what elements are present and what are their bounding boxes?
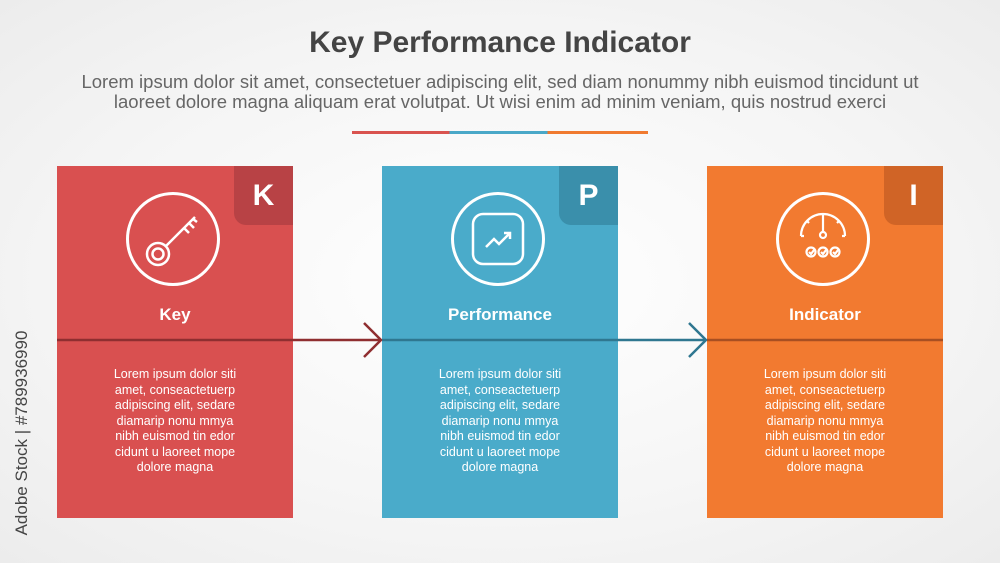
body text: Lorem ipsum dolor siti xyxy=(114,367,236,381)
arrow: performance to indicator xyxy=(382,323,706,357)
body text: adipiscing elit, sedare xyxy=(440,398,560,412)
body text: cidunt u laoreet mope xyxy=(115,444,235,458)
body text: dolore magna xyxy=(462,460,538,474)
subtitle xyxy=(81,71,919,112)
body text: amet, conseactetuerp xyxy=(765,382,885,396)
underline bars xyxy=(352,131,648,134)
tab K: K xyxy=(253,179,274,212)
title: Key Performance Indicator xyxy=(309,26,691,59)
tab I: I xyxy=(909,179,918,212)
line: indicator xyxy=(707,339,943,341)
icon: chart xyxy=(451,192,545,286)
body text: Lorem ipsum dolor siti xyxy=(764,367,886,381)
body text: diamarip nonu mmya xyxy=(767,414,883,428)
label: Performance xyxy=(448,305,552,324)
body text: Lorem ipsum dolor siti xyxy=(439,367,561,381)
body text: adipiscing elit, sedare xyxy=(765,398,885,412)
body text xyxy=(764,367,886,474)
body text: nibh euismod tin edor xyxy=(440,429,560,443)
body text: diamarip nonu mmya xyxy=(117,414,233,428)
icon: gauge xyxy=(776,192,870,286)
body text: dolore magna xyxy=(787,460,863,474)
body text: cidunt u laoreet mope xyxy=(440,444,560,458)
arrow: key to performance xyxy=(57,323,381,357)
body text: dolore magna xyxy=(137,460,213,474)
body text: amet, conseactetuerp xyxy=(440,382,560,396)
subtitle: laoreet dolore magna aliquam erat volutpat. Ut wisi enim ad minim veniam, quis nostrud exerci xyxy=(114,91,886,112)
panel: Performance xyxy=(382,166,618,518)
label: Indicator xyxy=(789,305,861,324)
body text: diamarip nonu mmya xyxy=(442,414,558,428)
icon: key xyxy=(126,192,220,286)
tab K xyxy=(234,166,293,225)
subtitle: Lorem ipsum dolor sit amet, consectetuer adipiscing elit, sed diam nonummy nibh euismod tincidunt ut xyxy=(81,71,919,92)
watermark side text: Adobe Stock | #789936990 xyxy=(12,331,31,535)
tab P: P xyxy=(578,179,598,212)
body text: nibh euismod tin edor xyxy=(765,429,885,443)
label: Key xyxy=(159,305,191,324)
body text: amet, conseactetuerp xyxy=(115,382,235,396)
body text: nibh euismod tin edor xyxy=(115,429,235,443)
body text xyxy=(114,367,236,474)
body text xyxy=(439,367,561,474)
panel: Key xyxy=(57,166,293,518)
panel: Indicator xyxy=(707,166,943,518)
tab I xyxy=(884,166,943,225)
body text: adipiscing elit, sedare xyxy=(115,398,235,412)
body text: cidunt u laoreet mope xyxy=(765,444,885,458)
tab P xyxy=(559,166,618,225)
